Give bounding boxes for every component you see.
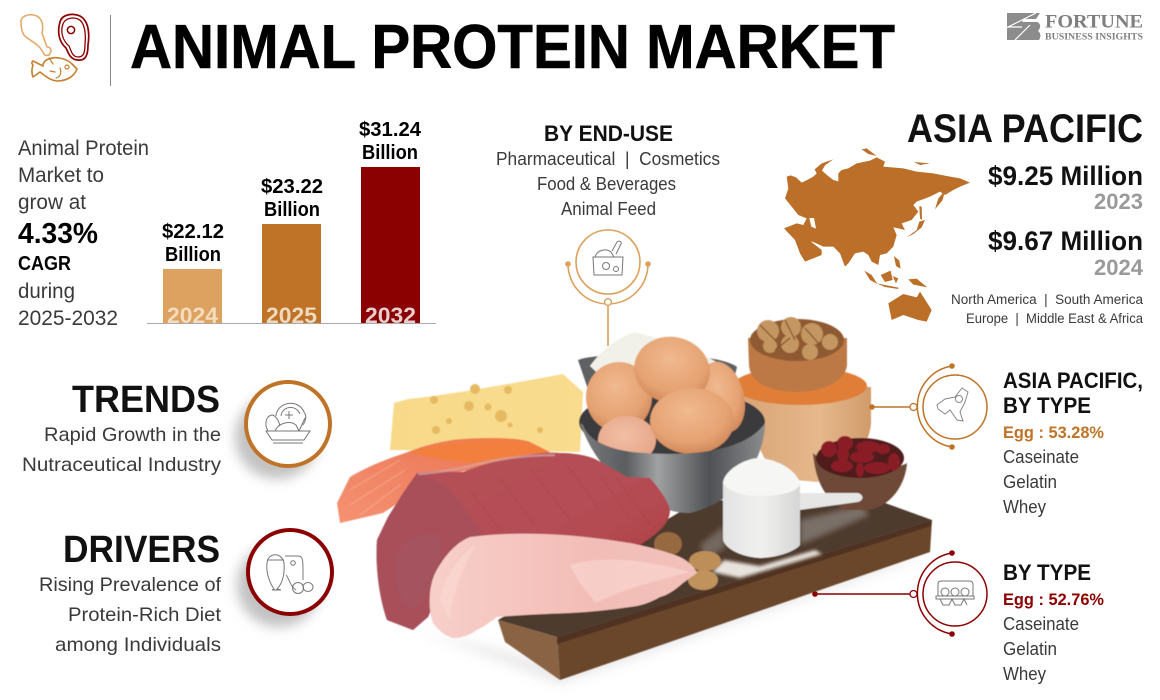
flour: [712, 550, 822, 578]
icon: chicken, meat and fish: [21, 14, 89, 81]
logo: Fortune Business Insights: FORTUNE: [1045, 12, 1143, 32]
icon: trends bowl: [235, 382, 330, 479]
text: drivers: [39, 529, 222, 656]
salmon fillet: [337, 438, 550, 523]
eggs: [586, 330, 752, 464]
kidney beans bowl: [813, 436, 907, 510]
text: CAGR summary: 2025-2032: [18, 307, 118, 330]
bar 2025: [261, 176, 323, 328]
text: Asia Pacific values: $9.25 Million: [988, 161, 1143, 191]
text: by type: Caseinate: [1003, 614, 1079, 634]
walnut pieces: [654, 532, 721, 590]
wooden board: [498, 500, 932, 680]
text: Asia Pacific by type: [1003, 368, 1143, 517]
text: Asia Pacific by type: Gelatin: [1003, 472, 1057, 492]
icon: animal feed with connector: [565, 230, 651, 346]
text: drivers: DRIVERS: [63, 529, 220, 571]
text: by type: Gelatin: [1003, 639, 1057, 659]
text: trends: [22, 379, 221, 476]
title: ANIMAL PROTEIN MARKET: [130, 13, 895, 82]
text: Asia Pacific values: 2024: [1094, 255, 1144, 280]
steel bowl: [580, 423, 765, 513]
ground shadow: [420, 556, 925, 684]
text: drivers: Protein-Rich Diet: [68, 604, 222, 626]
bar 2024: 2024: [167, 303, 219, 328]
text: CAGR summary: during: [18, 280, 75, 303]
text: by end-use: Animal Feed: [561, 198, 656, 219]
steel bowl interior: [579, 389, 765, 455]
small steel bowl with cottage cheese: [578, 332, 737, 395]
photo: protein foods on a wooden board: [337, 317, 932, 684]
map: Asia Pacific: [784, 148, 970, 322]
text: Asia Pacific values: 2023: [1094, 189, 1143, 214]
logo: Fortune Business Insights: [1006, 12, 1143, 42]
wooden bowl with lentils: [733, 367, 871, 482]
chicken breast: [430, 534, 697, 638]
bar 2032: 2032: [365, 303, 416, 328]
text: by end-use: BY END-USE: [544, 121, 673, 146]
text: by type: Whey: [1003, 664, 1046, 684]
text: CAGR summary: grow at: [18, 191, 86, 214]
text: Asia Pacific by type: BY TYPE: [1003, 393, 1091, 418]
text: Asia Pacific by type: Whey: [1003, 497, 1046, 517]
text: by end-use: [496, 121, 720, 219]
text: Asia Pacific values: [951, 161, 1144, 326]
bar 2025: 2025: [266, 303, 317, 328]
text: Asia Pacific by type: Egg : 53.28%: [1003, 424, 1104, 442]
bar 2024: Billion: [165, 244, 221, 266]
text: CAGR summary: Market to: [18, 164, 104, 187]
cheese wedge: [390, 374, 583, 452]
text: by type: [1003, 560, 1104, 684]
bar 2025: Billion: [264, 199, 320, 221]
bar chart: market size: [147, 119, 436, 328]
bar 2025: $23.22: [261, 176, 323, 198]
text: Asia Pacific by type: Caseinate: [1003, 447, 1079, 467]
text: CAGR summary: CAGR: [18, 253, 71, 275]
text: Asia Pacific by type: ASIA PACIFIC,: [1003, 368, 1143, 393]
icon: Asia Pacific by type with connector: [869, 363, 987, 450]
text: Asia Pacific values: North America | South America: [951, 292, 1143, 307]
bar 2032: $31.24: [359, 119, 422, 141]
text: by type: Egg : 52.76%: [1003, 591, 1104, 609]
text: drivers: Rising Prevalence of: [39, 574, 222, 596]
text: CAGR summary: Animal Protein: [18, 137, 149, 160]
text: by end-use: Food & Beverages: [537, 173, 676, 194]
bar 2032: Billion: [362, 142, 418, 164]
text: trends: Rapid Growth in the: [44, 424, 221, 446]
text: Asia Pacific values: Europe | Middle East & Africa: [966, 311, 1143, 326]
logo: Fortune Business Insights: BUSINESS INSIGHTS: [1045, 32, 1143, 42]
text: trends: Nutraceutical Industry: [22, 454, 221, 476]
text: trends: TRENDS: [72, 379, 220, 421]
icon: by type egg tray with connector: [812, 550, 987, 637]
protein powder scoop: [723, 458, 862, 558]
bar 2024: [162, 221, 224, 328]
text: CAGR summary: 4.33%: [18, 218, 98, 250]
text: by end-use: Pharmaceutical | Cosmetics: [496, 148, 720, 169]
text: Asia Pacific values: $9.67 Million: [988, 226, 1143, 256]
bar 2024: $22.12: [162, 221, 224, 243]
text: CAGR summary: [18, 137, 149, 330]
text: by type: BY TYPE: [1003, 560, 1091, 585]
bar 2032: [359, 119, 422, 328]
red meat: [377, 453, 670, 630]
text: drivers: among Individuals: [55, 634, 221, 656]
small wooden bowl with walnuts: [748, 317, 847, 392]
icon: drivers fish and meat: [237, 530, 332, 627]
